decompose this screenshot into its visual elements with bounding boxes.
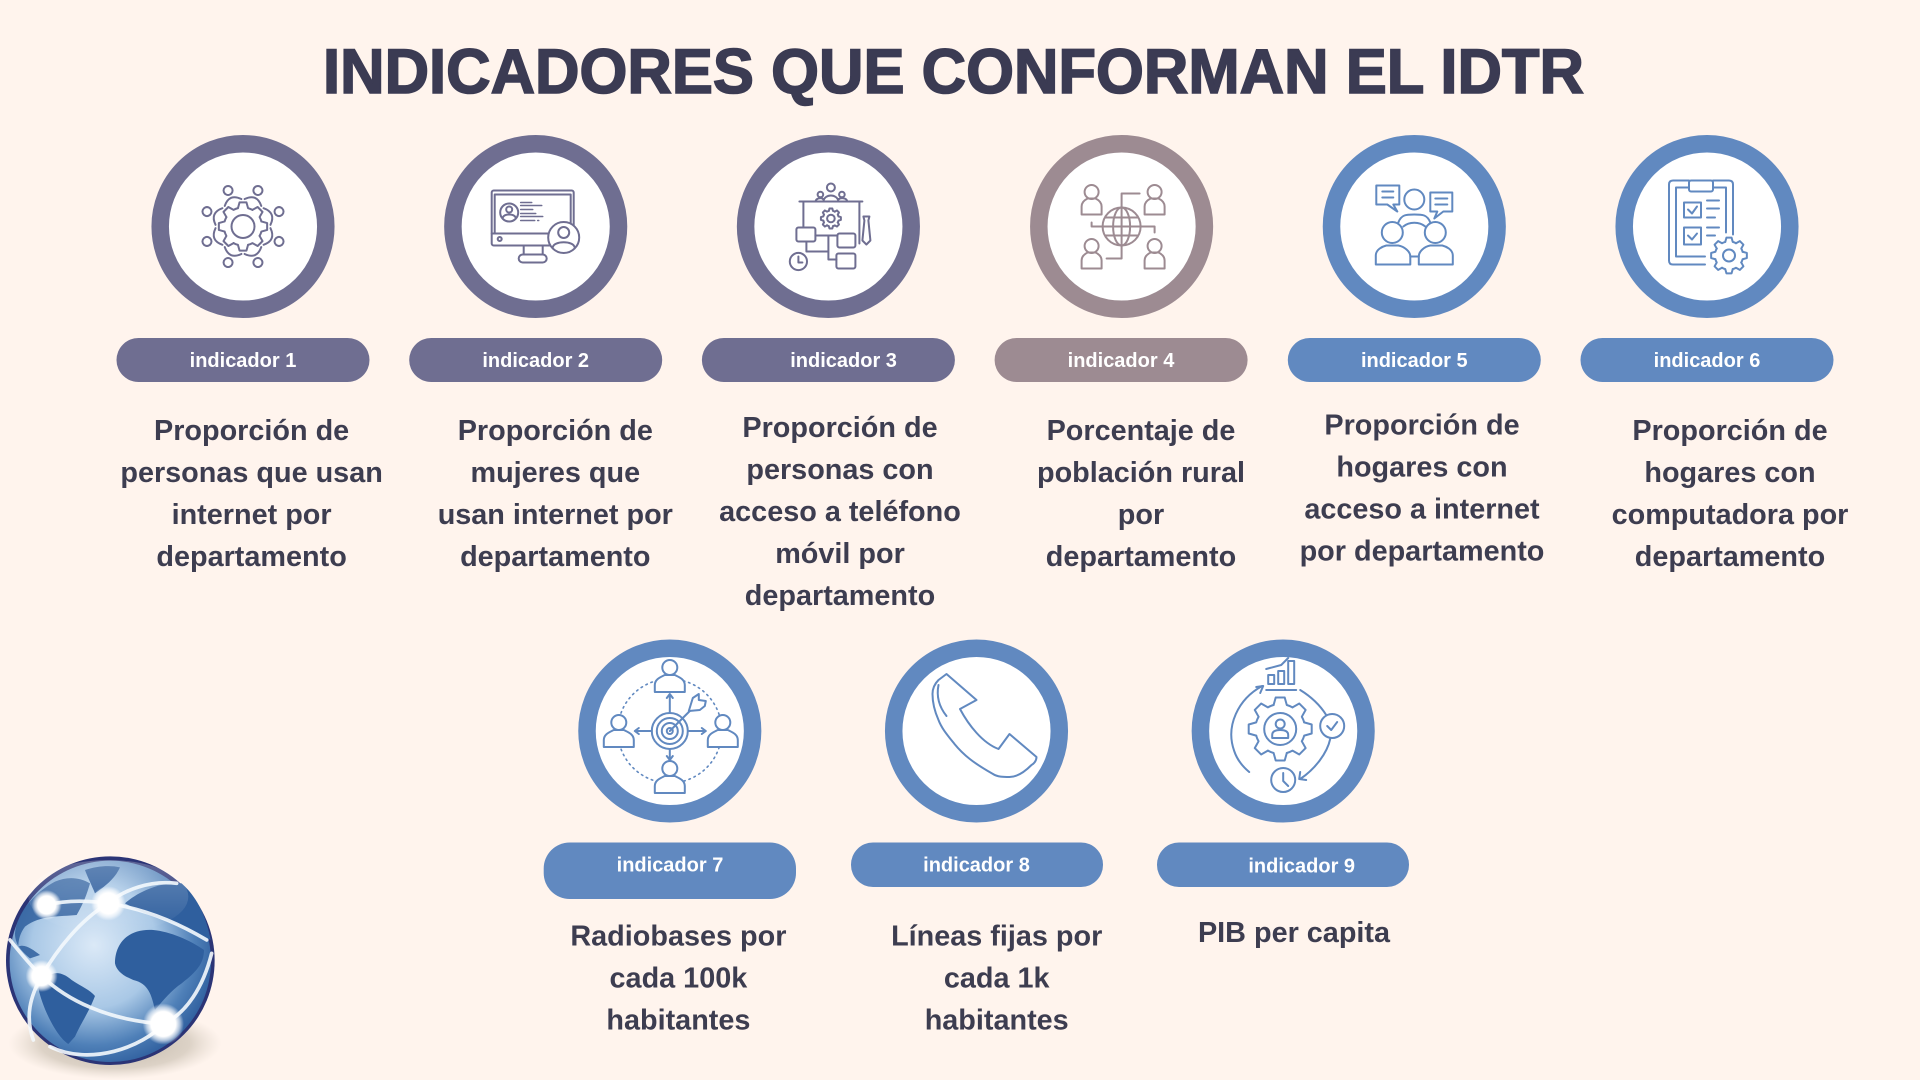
pill: indicador 8: indicador 8 xyxy=(923,854,1030,876)
pill: indicador 2: indicador 2 xyxy=(482,350,589,372)
text: indicator 5 description xyxy=(1300,410,1544,568)
text: indicator 3 description: acceso a teléfono xyxy=(719,496,961,528)
greenland xyxy=(85,866,120,893)
text: indicator 3 description xyxy=(719,412,961,612)
text: indicator 5 description: acceso a internet xyxy=(1304,494,1540,526)
indicator 1: ring and icon xyxy=(160,144,326,309)
text: indicator 8 description xyxy=(891,920,1102,1036)
title: INDICADORES QUE CONFORMAN EL IDTR xyxy=(323,37,1584,107)
pill: indicador 9 xyxy=(1157,842,1409,887)
pill: indicador 5 xyxy=(1288,338,1541,382)
africa and europe xyxy=(115,930,204,1010)
text: indicator 7 description: cada 100k xyxy=(610,962,748,994)
text: indicator 5 description: por departamento xyxy=(1300,536,1544,568)
text: indicator 4 description: departamento xyxy=(1046,541,1236,573)
text: indicator 6 description: Proporción de xyxy=(1632,415,1828,447)
indicator 8: ring and icon xyxy=(894,648,1059,814)
text: indicator 8 description: Líneas fijas por xyxy=(891,920,1102,952)
text: indicator 1 description: Proporción de xyxy=(154,415,349,447)
text: indicator 2 description: mujeres que xyxy=(470,457,640,489)
icon: monitor with user xyxy=(492,190,579,262)
pill: indicador 3: indicador 3 xyxy=(790,350,897,372)
text: indicator 4 description: Porcentaje de xyxy=(1047,415,1235,447)
icon: clipboard with gear xyxy=(1669,180,1747,273)
icon: gear cycle with chart xyxy=(1231,658,1344,792)
pill: indicador 9: indicador 9 xyxy=(1248,856,1355,878)
glass highlight xyxy=(28,860,188,933)
eurasia xyxy=(125,883,211,940)
text: indicator 4 description xyxy=(1037,415,1245,573)
pill: indicador 3 xyxy=(702,338,955,382)
text: indicator 4 description: por xyxy=(1118,499,1164,531)
indicator 4: ring and icon xyxy=(1039,144,1204,309)
text: indicator 6 description: hogares con xyxy=(1644,457,1816,489)
text: indicator 7 description: habitantes xyxy=(606,1004,750,1036)
icon: telephone handset xyxy=(932,674,1036,777)
indicator 6: ring and icon xyxy=(1624,144,1790,309)
text: indicator 3 description: departamento xyxy=(745,580,935,612)
text: indicator 6 description: departamento xyxy=(1635,541,1825,573)
text: indicator 6 description xyxy=(1612,415,1848,573)
text: indicator 1 description: internet por xyxy=(172,499,332,531)
illustration: internet globe xyxy=(6,856,222,1079)
text: indicator 3 description: personas con xyxy=(746,454,934,486)
pill: indicador 1 xyxy=(116,338,370,382)
pill: indicador 6 xyxy=(1580,338,1834,382)
south america xyxy=(38,973,95,1044)
pill: indicador 5: indicador 5 xyxy=(1361,350,1468,372)
text: indicator 2 description xyxy=(438,415,673,573)
text: indicator 9 description: PIB per capita xyxy=(1198,917,1391,949)
north america xyxy=(15,878,90,958)
text: indicator 4 description: población rural xyxy=(1037,457,1245,489)
indicator 5: ring and icon xyxy=(1332,144,1497,309)
text: indicator 7 description xyxy=(570,920,786,1036)
pill: indicador 4: indicador 4 xyxy=(1068,350,1175,372)
text: indicator 1 description: personas que usan xyxy=(120,457,383,489)
pill: indicador 7: indicador 7 xyxy=(617,854,723,876)
text: indicator 3 description: Proporción de xyxy=(742,412,938,444)
icon: globe with four people xyxy=(1082,185,1165,268)
pill: indicador 6: indicador 6 xyxy=(1654,350,1760,372)
text: indicator 8 description: cada 1k xyxy=(944,962,1051,994)
text: indicator 1 description xyxy=(120,415,383,573)
text: indicator 2 description: departamento xyxy=(460,541,651,573)
indicator 2: ring and icon xyxy=(453,144,618,309)
text: indicator 7 description: Radiobases por xyxy=(570,920,786,952)
indicator 9: ring and icon xyxy=(1200,648,1366,814)
text: indicator 2 description: usan internet por xyxy=(438,499,673,531)
text: indicator 5 description: Proporción de xyxy=(1324,410,1520,442)
icon: gear with people network xyxy=(199,183,287,270)
pill: indicador 2 xyxy=(409,338,662,382)
pill: indicador 1: indicador 1 xyxy=(190,350,296,372)
pill: indicador 4 xyxy=(995,338,1248,382)
text: indicator 3 description: móvil por xyxy=(775,538,905,570)
text: indicator 6 description: computadora por xyxy=(1612,499,1848,531)
indicator 7: ring and icon xyxy=(587,648,753,814)
icon: target with four people xyxy=(604,660,738,793)
pill: indicador 8 xyxy=(851,842,1103,887)
icon: three people talking xyxy=(1376,186,1453,264)
icon: meeting and flowchart xyxy=(790,184,870,270)
indicator 3: ring and icon xyxy=(746,144,911,309)
text: indicator 2 description: Proporción de xyxy=(458,415,653,447)
text: indicator 5 description: hogares con xyxy=(1336,452,1508,484)
text: indicator 8 description: habitantes xyxy=(925,1004,1069,1036)
text: indicator 1 description: departamento xyxy=(156,541,347,573)
pill: indicador 7 xyxy=(544,842,796,899)
